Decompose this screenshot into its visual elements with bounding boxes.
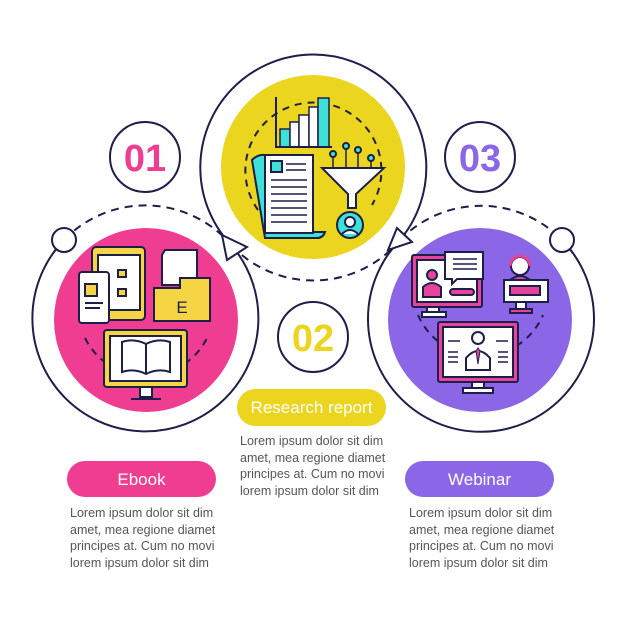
icon: folder [154,250,210,321]
icon: phone [79,272,109,323]
icon: headset presenter [504,256,548,313]
text: webinar description: principes at. Cum no movi [409,539,554,553]
number 01 [110,122,180,192]
number 03: 03 [459,138,501,180]
icon: document scroll [252,155,325,238]
text: research description: lorem ipsum dolor sit dim [240,484,379,498]
icon: video call monitor [412,252,483,317]
label: Webinar: Webinar [448,470,511,489]
label: Ebook [67,461,216,497]
text: research description [240,434,386,498]
icon: tablet [92,247,145,320]
icon: bar chart [276,97,332,147]
icon: folder: E [176,298,188,317]
arrow: step 2 to 3 [388,228,412,250]
text: ebook description [70,506,216,570]
panel: ebook circle [54,228,238,412]
text: research description: Lorem ipsum dolor sit dim [240,434,383,448]
text: webinar description: amet, mea regione diamet [409,523,555,537]
label: Ebook: Ebook [117,470,166,489]
number 02: 02 [292,318,334,360]
label: Webinar [405,461,554,497]
text: webinar description: lorem ipsum dolor sit dim [409,556,548,570]
text: ebook description: amet, mea regione diamet [70,523,216,537]
icon: presenter monitor [438,322,518,393]
ring endpoint circles [52,228,574,252]
number 01: 01 [124,138,166,180]
label: Research report [237,389,386,426]
text: ebook description: Lorem ipsum dolor sit dim [70,506,213,520]
panel: webinar circle [388,228,572,412]
text: research description: principes at. Cum no movi [240,467,385,481]
label: Research report: Research report [251,398,373,417]
arrow: step 1 to 2 [222,235,247,260]
number 03 [445,122,515,192]
connector rings [32,55,594,432]
number 02 [278,302,348,372]
text: research description: amet, mea regione diamet [240,451,386,465]
text: webinar description [409,506,555,570]
text: webinar description: Lorem ipsum dolor sit dim [409,506,552,520]
icon: monitor with book [104,330,187,399]
panel: research circle [221,75,405,259]
text: ebook description: lorem ipsum dolor sit dim [70,556,209,570]
icon: funnel with user [322,143,384,238]
text: ebook description: principes at. Cum no movi [70,539,215,553]
